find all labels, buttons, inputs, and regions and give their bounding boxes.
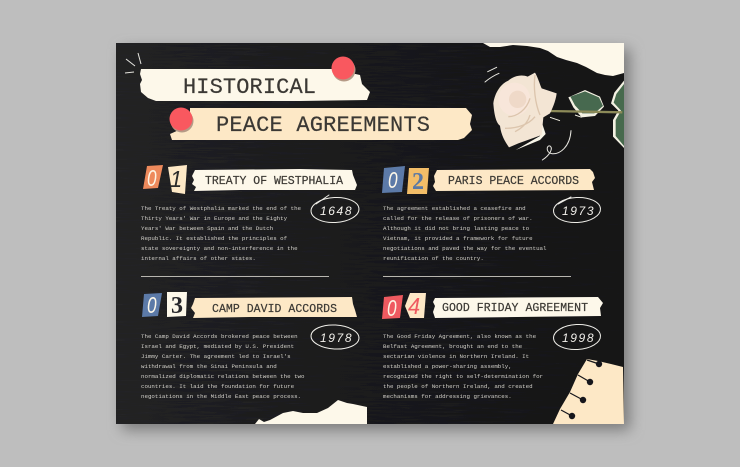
year badge: 1978 bbox=[320, 331, 353, 345]
body text: normalized diplomatic relations between the two bbox=[141, 373, 305, 380]
outer petal lines bbox=[505, 75, 540, 132]
number tiles 02: 2 bbox=[412, 169, 424, 195]
body text: recognized the right to self-determination for bbox=[383, 373, 543, 380]
flower bbox=[493, 73, 557, 147]
body text: reunification of the country. bbox=[383, 255, 484, 262]
body text: The Camp David Accords brokered peace between bbox=[141, 333, 298, 340]
body text: Jimmy Carter. The agreement led to Israel's bbox=[141, 353, 291, 360]
number tiles 04: 4 bbox=[408, 293, 420, 319]
body text: sectarian violence in Northern Ireland. It bbox=[383, 353, 529, 360]
icon: red pin left bbox=[170, 108, 194, 132]
petal highlight bbox=[516, 124, 546, 150]
body text: internal affairs of other states. bbox=[141, 255, 256, 262]
number tiles 01 bbox=[143, 165, 187, 194]
torn paper: top right bbox=[483, 43, 624, 76]
number tiles 04: 0 bbox=[387, 297, 397, 322]
section 03 bbox=[141, 292, 360, 400]
number tiles 03: 0 bbox=[147, 294, 157, 319]
body text: Years' War between Spain and the Dutch bbox=[141, 225, 273, 232]
notebook paper corner bbox=[553, 359, 624, 424]
heading strip bbox=[192, 169, 357, 191]
icon: rose bbox=[493, 73, 624, 150]
body text: Vietnam, it provided a framework for future bbox=[383, 235, 533, 242]
heading strip: PARIS PEACE ACCORDS bbox=[448, 175, 579, 188]
number tiles 02: 0 bbox=[388, 169, 398, 194]
year badge bbox=[310, 324, 360, 350]
year badge: 1973 bbox=[562, 204, 595, 218]
body text: Although it did not bring lasting peace to bbox=[383, 225, 530, 232]
leaf right bbox=[611, 81, 624, 148]
number tiles 03 bbox=[142, 292, 187, 319]
title line one: HISTORICAL bbox=[183, 75, 316, 100]
body text: Thirty Years' War in Europe and the Eighty bbox=[141, 215, 288, 222]
section 01 bbox=[141, 165, 360, 262]
year badge: 1648 bbox=[320, 204, 353, 218]
body text: Republic. It established the principles of bbox=[141, 235, 288, 242]
card shadow bbox=[122, 49, 630, 430]
body text bbox=[141, 333, 305, 400]
heading strip bbox=[433, 169, 595, 191]
decorative doodle marks near rose bbox=[485, 67, 571, 160]
icon: red pin top bbox=[332, 56, 356, 82]
inner petal shading bbox=[498, 83, 530, 116]
body text: negotiations and paved the way for the eventual bbox=[383, 245, 547, 252]
body text: withdrawal from the Sinai Peninsula and bbox=[141, 363, 277, 370]
number tiles 01: 0 bbox=[147, 167, 157, 192]
body text: called for the release of prisoners of war. bbox=[383, 215, 533, 222]
section 04 bbox=[382, 293, 603, 400]
body text bbox=[383, 205, 547, 262]
year badge: 1998 bbox=[562, 331, 595, 345]
body text: Israel and Egypt, mediated by U.S. President bbox=[141, 343, 294, 350]
stem highlight bbox=[550, 115, 582, 121]
heading strip: CAMP DAVID ACCORDS bbox=[212, 303, 337, 316]
body text: established a power-sharing assembly, bbox=[383, 363, 512, 370]
heading strip: GOOD FRIDAY AGREEMENT bbox=[442, 302, 588, 315]
body text: The Good Friday Agreement, also known as the bbox=[383, 333, 537, 340]
body text: the people of Northern Ireland, and created bbox=[383, 383, 533, 390]
heading strip: TREATY OF WESTPHALIA bbox=[205, 175, 343, 188]
body text: The Treaty of Westphalia marked the end of the bbox=[141, 205, 302, 212]
icon: sparkle lines bbox=[125, 53, 141, 73]
section 02 bbox=[382, 166, 601, 262]
body text: countries. It laid the foundation for future bbox=[141, 383, 295, 390]
number tiles 04 bbox=[382, 293, 426, 322]
heading strip bbox=[191, 297, 357, 318]
year badge bbox=[553, 323, 601, 351]
year badge bbox=[553, 196, 601, 224]
title strip: peace agreements bbox=[170, 108, 472, 140]
title line two: PEACE AGREEMENTS bbox=[216, 113, 430, 138]
leaf middle bbox=[568, 90, 604, 117]
panel: chalkboard card bbox=[116, 43, 624, 424]
year badge bbox=[310, 195, 360, 224]
body text: mechanisms for addressing grievances. bbox=[383, 393, 512, 400]
number tiles 01: 1 bbox=[170, 166, 182, 192]
heading strip bbox=[433, 297, 603, 318]
stem bbox=[548, 111, 622, 112]
title strip: historical bbox=[140, 69, 370, 101]
body text bbox=[141, 205, 302, 262]
body text: state sovereignty and non-interference in the bbox=[141, 245, 298, 252]
body text bbox=[383, 333, 543, 400]
body text: negotiations in the Middle East peace process. bbox=[141, 393, 301, 400]
number tiles 02 bbox=[382, 166, 429, 195]
body text: The agreement established a ceasefire and bbox=[383, 205, 526, 212]
body text: Belfast Agreement, brought an end to the bbox=[383, 343, 523, 350]
number tiles 03: 3 bbox=[171, 293, 183, 319]
torn paper: bottom centre bbox=[255, 400, 367, 424]
